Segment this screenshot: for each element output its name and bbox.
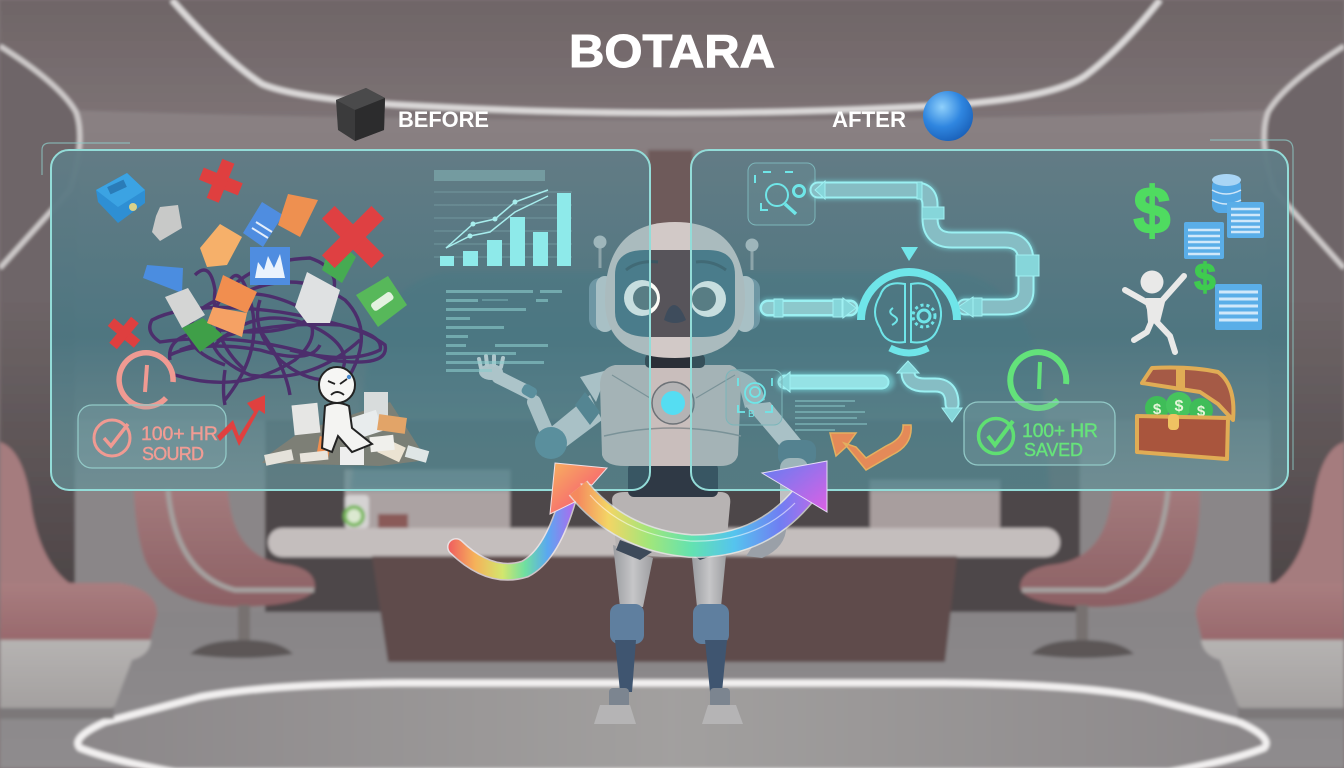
chart: before bar chart	[434, 170, 572, 266]
crumpled paper	[152, 205, 182, 241]
green card right	[356, 276, 407, 327]
robot	[479, 222, 816, 724]
icon: magnifier in box	[748, 163, 815, 225]
icon: tangled purple wires	[150, 258, 385, 405]
orange box top	[278, 194, 318, 237]
icon: after clock	[1010, 352, 1066, 408]
chart trend lines	[446, 190, 548, 248]
panel: after glass base	[691, 150, 1288, 490]
arrow: rainbow second segment	[578, 461, 827, 546]
paper pile	[262, 392, 429, 466]
icon: before clutter of documents	[96, 159, 407, 352]
icon: dark cube	[336, 88, 385, 141]
chart bars	[440, 193, 571, 266]
blue crumple	[143, 265, 183, 293]
icon: treasure chest: $	[1153, 401, 1162, 418]
red x small top	[199, 159, 243, 203]
title: BOTARA	[569, 25, 775, 77]
green sheet	[182, 318, 223, 352]
green card top	[322, 242, 356, 283]
arrow: glowing pipe network	[768, 181, 1039, 422]
robot chest core	[652, 382, 694, 424]
robot right arm and hand	[735, 370, 816, 558]
robot torso	[600, 365, 741, 466]
text block: after data lines	[795, 400, 867, 431]
grey doc	[165, 288, 205, 328]
heading: before: BEFORE	[398, 107, 489, 132]
icon: treasure chest: $	[1197, 403, 1206, 420]
spreadsheet mid	[1184, 222, 1224, 259]
icon: database and spreadsheets	[1184, 174, 1264, 330]
heading: after: AFTER	[832, 107, 906, 132]
small red x	[108, 317, 140, 349]
far chairs	[0, 442, 72, 585]
callout text: SAVED	[1024, 440, 1083, 460]
orange folder	[207, 307, 247, 337]
text block: before data lines	[446, 290, 562, 372]
icon: brain in box lower: B	[748, 409, 755, 420]
decorative ceiling light strips follow	[172, 0, 1160, 113]
decorative corner brackets	[42, 143, 130, 175]
robot left arm and hand	[479, 356, 608, 459]
icon: red check circle	[94, 420, 130, 456]
person	[319, 367, 372, 452]
arrow: rainbow first segment	[456, 463, 607, 572]
panel: before glass base	[51, 150, 650, 490]
icon: happy jumping person	[1125, 270, 1184, 352]
arrow: red zigzag	[217, 395, 265, 446]
icon: large dollar: $	[1134, 173, 1170, 247]
icon: small dollar: $	[1194, 257, 1216, 299]
icon: green check circle	[978, 418, 1014, 454]
mid chairs	[134, 490, 315, 607]
callout text: 100+ HR	[1022, 420, 1098, 442]
robot waist and hips	[612, 463, 730, 560]
white crumple	[295, 272, 340, 323]
callout text: 100+ HR	[141, 423, 218, 445]
icon: brain in box lower	[726, 370, 782, 425]
orange note	[200, 224, 242, 267]
panel: after glass tint and outline	[691, 140, 1293, 490]
callout: 100+ hr saved	[964, 402, 1115, 465]
callout: 100+ hr sourd	[78, 405, 226, 468]
blue box	[96, 173, 145, 223]
big red x	[322, 206, 384, 268]
callout text: SOURD	[142, 444, 204, 464]
arrow: orange curved	[830, 425, 911, 470]
blue doc	[243, 202, 283, 247]
robot visor	[615, 250, 735, 337]
robot legs	[594, 545, 743, 724]
blue chart card	[250, 247, 290, 285]
icon: overwhelmed person on paper pile	[262, 367, 429, 466]
robot head	[589, 222, 760, 358]
icon: treasure chest: $	[1175, 398, 1184, 415]
spreadsheet top	[1227, 202, 1264, 238]
arrow: rainbow transformation	[456, 461, 827, 572]
table	[268, 528, 1060, 557]
robot eyes	[624, 280, 726, 317]
icon: before clock	[119, 353, 173, 407]
icon: blue sphere	[923, 91, 973, 141]
database	[1212, 174, 1241, 213]
panel: before glass tint and outline	[42, 143, 650, 490]
icon: treasure chest	[1137, 368, 1233, 459]
icon: brain gear hub	[861, 247, 957, 353]
spreadsheet bottom	[1215, 284, 1262, 330]
